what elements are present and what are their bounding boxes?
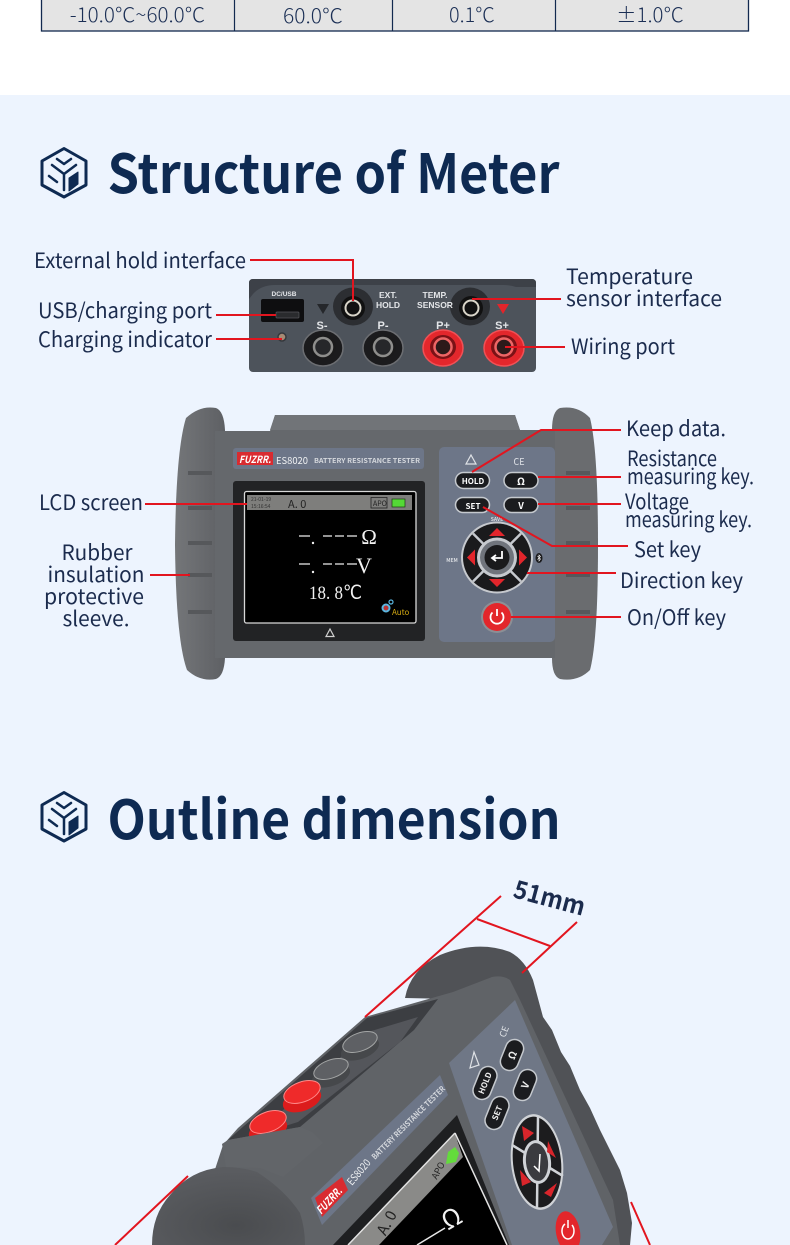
port legends: P- xyxy=(378,320,389,332)
brand strip: BATTERY RESISTANCE TESTER xyxy=(314,455,421,465)
external hold socket xyxy=(333,288,373,326)
near rubber bumper xyxy=(152,1167,305,1245)
voltage key: V xyxy=(517,499,524,512)
label: wiring port: Wiring port xyxy=(571,331,675,361)
label: keep data: Keep data. xyxy=(626,413,726,443)
label: charging indicator: Charging indicator xyxy=(38,324,213,354)
label: external hold interface: External hold interface xyxy=(34,245,246,275)
LCD bezel and screen: V xyxy=(356,553,372,578)
far rubber bumper xyxy=(405,947,632,1245)
icon: hexagonal cube xyxy=(42,148,86,197)
voltage key xyxy=(504,498,538,512)
port legends: SENSOR xyxy=(417,300,453,310)
brand strip: FUZRR. xyxy=(312,1183,346,1218)
label: set key: Set key xyxy=(634,534,701,564)
dimension: 51mm xyxy=(365,870,590,1017)
callouts: meter front labels xyxy=(39,413,754,633)
port legends xyxy=(316,290,509,332)
HOLD key: HOLD xyxy=(462,476,485,487)
charging indicator LED xyxy=(278,333,286,341)
callouts: meter front labels: measuring key. xyxy=(625,504,752,534)
heading: Structure of Meter: Structure of Meter xyxy=(108,130,560,209)
ohm key: Ω xyxy=(517,473,525,488)
left rubber bumper xyxy=(175,407,225,680)
black S- jack xyxy=(303,330,343,366)
voltage key: V xyxy=(516,1078,533,1091)
USB port: DC/USB xyxy=(272,291,297,298)
photo: connector ports panel xyxy=(249,279,536,372)
SET key xyxy=(482,1094,512,1132)
photo: meter front view xyxy=(175,407,598,680)
brand strip: BATTERY RESISTANCE TESTER xyxy=(369,1083,448,1162)
callouts: port labels xyxy=(34,245,722,361)
angled LCD screen: A. 0 xyxy=(371,1207,402,1239)
callouts: port labels: sensor interface xyxy=(566,283,722,313)
HOLD key xyxy=(470,1064,500,1102)
key panel xyxy=(439,447,555,642)
HOLD key: HOLD xyxy=(476,1070,495,1096)
ohm key xyxy=(504,472,538,488)
port legends: P+ xyxy=(436,320,450,332)
brand strip: ES8020 xyxy=(344,1156,374,1189)
key panel: SAVE xyxy=(491,516,503,523)
brand strip: FUZRR. xyxy=(239,451,271,466)
meter body xyxy=(215,415,555,658)
front lip xyxy=(222,1127,323,1177)
callouts: meter front labels: measuring key. xyxy=(627,461,754,491)
red S+ jack xyxy=(484,330,524,366)
LCD bezel and screen: 21-01-19 xyxy=(251,496,271,503)
LCD bezel and screen: 15:16:54 xyxy=(251,503,271,510)
LCD bezel and screen: Auto xyxy=(392,607,410,618)
label: direction key: Direction key xyxy=(620,565,743,595)
LCD bezel and screen xyxy=(233,481,425,641)
key panel: MEM xyxy=(446,557,458,564)
port legends: HOLD xyxy=(376,300,400,310)
angled LCD screen: APO xyxy=(428,1159,448,1181)
direction pad xyxy=(506,1112,568,1212)
LCD bezel and screen: A. 0 xyxy=(288,496,306,512)
ohm key xyxy=(498,1037,526,1073)
top recess xyxy=(228,999,438,1140)
red P+ jack xyxy=(423,330,463,366)
temperature sensor socket xyxy=(450,288,490,326)
table: temperature specification row xyxy=(42,0,748,31)
table: temperature specification row: ±1.0℃ xyxy=(616,0,684,28)
SET key: SET xyxy=(466,501,480,512)
dimension lines: lower extension lines xyxy=(115,1176,650,1245)
USB port xyxy=(261,291,304,322)
photo: meter angled view xyxy=(152,947,632,1245)
port legends: S- xyxy=(316,320,328,332)
SET key xyxy=(456,498,490,512)
gray socket caps xyxy=(309,1027,382,1092)
angled key panel: CE xyxy=(496,1024,512,1039)
brand strip: ES8020 xyxy=(276,453,308,467)
ohm key: Ω xyxy=(503,1048,520,1061)
angled LCD screen: Ω xyxy=(434,1197,468,1238)
port legends: TEMP. xyxy=(423,290,447,300)
label: voltage measuring key: Voltage xyxy=(625,486,689,516)
label: rubber insulation protective sleeve: protective xyxy=(44,581,144,611)
direction pad xyxy=(461,522,533,594)
angled key panel xyxy=(449,1000,613,1245)
label: rubber insulation protective sleeve xyxy=(44,537,144,633)
bluetooth mark xyxy=(536,553,542,563)
label: resistance measuring key: Resistance xyxy=(627,443,717,473)
dimension: 51mm: 51mm xyxy=(510,870,590,924)
red socket caps xyxy=(245,1076,325,1147)
label: USB/charging port: USB/charging port xyxy=(38,295,212,325)
heading: Outline dimension: Outline dimension xyxy=(108,776,560,855)
key panel: CE xyxy=(513,455,525,468)
brand strip xyxy=(311,1075,448,1225)
brand strip xyxy=(233,448,424,469)
body xyxy=(200,976,620,1245)
HOLD key xyxy=(456,472,490,488)
LCD bezel and screen: APO xyxy=(373,499,387,509)
label: temperature sensor interface: Temperature xyxy=(566,261,693,291)
LCD bezel and screen: Ω xyxy=(361,525,377,549)
table: temperature specification row: 60.0℃ xyxy=(283,0,343,29)
LCD bezel and screen: 18. 8℃ xyxy=(309,583,362,604)
label: LCD screen: LCD screen xyxy=(39,487,143,517)
label: on/off key: On/Off key xyxy=(627,602,726,632)
angled LCD screen xyxy=(333,1115,509,1245)
SET key: SET xyxy=(490,1104,505,1122)
black P- jack xyxy=(363,330,403,366)
power key xyxy=(481,601,513,633)
port legends: EXT. xyxy=(379,290,397,300)
label: rubber insulation protective sleeve: sleeve. xyxy=(62,603,130,633)
port legends: S+ xyxy=(495,320,509,332)
label: rubber insulation protective sleeve: Rubber xyxy=(62,537,133,567)
label: rubber insulation protective sleeve: insulation xyxy=(48,559,144,589)
icon: hexagonal cube xyxy=(42,792,86,841)
power key xyxy=(553,1209,583,1245)
voltage key xyxy=(511,1067,539,1103)
right rubber bumper xyxy=(552,407,598,680)
